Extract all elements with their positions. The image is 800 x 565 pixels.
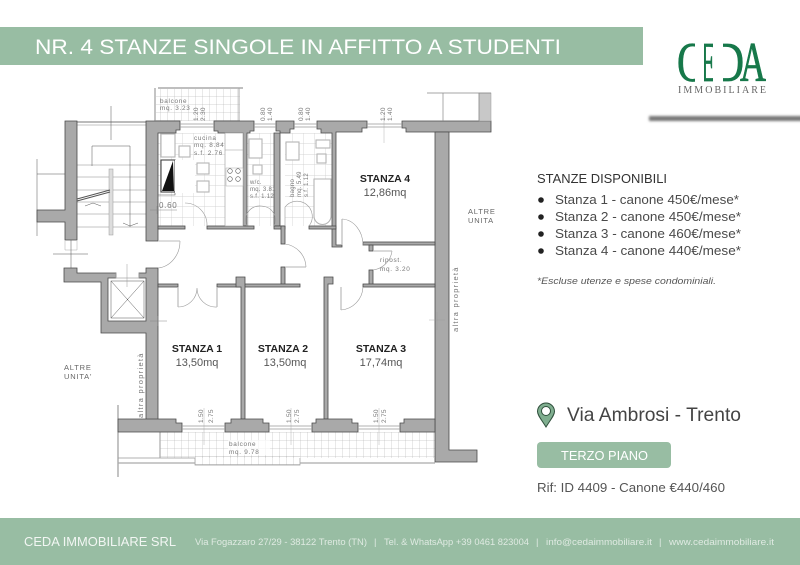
room labels xyxy=(172,173,410,369)
window dimensions: 2.30 xyxy=(200,107,207,121)
logo: CEDA Immobiliare: D xyxy=(714,32,744,94)
east wall xyxy=(435,132,477,462)
other-unit labels: mq. 9.78 xyxy=(229,449,259,456)
rooms north walls xyxy=(158,284,178,287)
footer: | xyxy=(536,537,538,548)
available rooms list xyxy=(537,171,741,287)
kitchen fixtures: cucina xyxy=(194,135,217,142)
logo: CEDA Immobiliare: IMMOBILIARE xyxy=(678,85,766,96)
other-unit labels xyxy=(64,207,496,456)
walls xyxy=(37,93,491,462)
window dimensions: 1.20 xyxy=(193,107,200,121)
upper balcony: balcone xyxy=(160,98,187,105)
other-unit labels: UNITA' xyxy=(64,372,92,381)
kitchen fixtures xyxy=(150,133,243,226)
window dimensions: 0.80 xyxy=(298,107,305,121)
other-unit labels: mq. 3.20 xyxy=(380,266,410,273)
window dimensions: 2.75 xyxy=(381,409,388,423)
other-unit labels: UNITA xyxy=(468,216,494,225)
available rooms list: *Escluse utenze e spese condominiali. xyxy=(537,276,716,287)
logo: CEDA Immobiliare: C xyxy=(677,32,704,94)
doors xyxy=(158,201,392,310)
window dimensions: 1.40 xyxy=(267,107,274,121)
main north wall pieces xyxy=(146,121,180,241)
upper balcony xyxy=(155,88,243,121)
room labels: STANZA 4 xyxy=(360,173,410,185)
other-unit labels: altra proprietà xyxy=(136,352,145,418)
logo: CEDA Immobiliare: A xyxy=(740,32,766,94)
footer: www.cedaimmobiliare.it xyxy=(668,537,774,548)
kitchen fixtures: 0.60 xyxy=(159,201,177,210)
footer: Tel. & WhatsApp +39 0461 823004 xyxy=(384,537,529,548)
reference line: Rif: ID 4409 - Canone €440/460 xyxy=(537,481,725,495)
available rooms list: STANZE DISPONIBILI xyxy=(537,171,667,186)
room labels: 13,50mq xyxy=(264,357,306,369)
room labels: 17,74mq xyxy=(360,357,402,369)
footer: CEDA IMMOBILIARE SRL xyxy=(24,535,176,549)
window dimensions: 1.40 xyxy=(387,107,394,121)
bathroom fixtures: s.f. 1.12 xyxy=(250,194,274,200)
floor badge xyxy=(537,442,671,468)
other-unit labels: ALTRE xyxy=(64,363,92,372)
available rooms list: Stanza 1 - canone 450€/mese* xyxy=(555,192,739,207)
elevator shaft xyxy=(111,264,167,326)
other-unit labels: ALTRE xyxy=(468,207,496,216)
title banner: NR. 4 STANZE SINGOLE IN AFFITTO A STUDENTI xyxy=(35,35,561,59)
floor plan xyxy=(37,88,496,477)
window dimensions: 2.75 xyxy=(208,409,215,423)
window dimensions: 1.50 xyxy=(198,409,205,423)
footer: Via Fogazzaro 27/29 - 38122 Trento (TN) xyxy=(195,537,367,548)
logo: CEDA Immobiliare xyxy=(677,32,766,96)
available rooms list: Stanza 4 - canone 440€/mese* xyxy=(555,243,741,258)
bathroom fixtures: mq. 5.49 xyxy=(297,171,303,197)
title banner xyxy=(0,27,643,65)
elevator wall xyxy=(64,268,158,420)
staircase xyxy=(37,106,146,268)
room labels: 13,50mq xyxy=(176,357,218,369)
other-unit labels: balcone xyxy=(229,441,256,448)
stanza 4 south wall, ripostiglio xyxy=(363,242,435,245)
footer: | xyxy=(659,537,661,548)
kitchen and bath south walls xyxy=(158,226,185,229)
other-unit labels: altra proprietà xyxy=(451,266,460,332)
room labels: STANZA 1 xyxy=(172,343,222,355)
south wall blocks xyxy=(118,419,182,432)
room labels: STANZA 3 xyxy=(356,343,406,355)
window dimensions: 2.75 xyxy=(294,409,301,423)
logo shadow bar xyxy=(649,116,800,121)
room labels: STANZA 2 xyxy=(258,343,308,355)
window dimensions: 1.40 xyxy=(305,107,312,121)
room labels: 12,86mq xyxy=(364,187,406,199)
bathroom fixtures: s.f. 1.12 xyxy=(304,173,310,197)
other-unit labels: ripost. xyxy=(380,257,402,264)
footer xyxy=(0,518,800,565)
tiled floors: kitchen and bathrooms xyxy=(158,133,332,226)
stair wall xyxy=(37,121,77,240)
window dimensions: 1.20 xyxy=(380,107,387,121)
window dimensions xyxy=(193,107,394,423)
footer: | xyxy=(374,537,376,548)
window dimensions: 1.50 xyxy=(373,409,380,423)
floor badge: TERZO PIANO xyxy=(561,448,648,463)
bathroom fixtures: bagno xyxy=(290,178,296,197)
bathroom fixtures xyxy=(249,139,331,224)
lower balcony xyxy=(118,405,435,477)
bathroom fixtures: mq. 3.81 xyxy=(250,187,276,193)
corridor stub xyxy=(281,267,285,285)
kitchen fixtures: s.f. 2.76 xyxy=(194,150,223,157)
windows xyxy=(116,124,402,429)
logo: CEDA Immobiliare: E xyxy=(700,32,717,94)
window dimensions: 1.50 xyxy=(286,409,293,423)
icon: location pin xyxy=(538,403,554,427)
bathroom fixtures: w/c. xyxy=(249,180,262,186)
window dimensions: 0.80 xyxy=(260,107,267,121)
partitions xyxy=(236,277,245,419)
available rooms list: Stanza 2 - canone 450€/mese* xyxy=(555,209,741,224)
upper balcony: mq. 3.23 xyxy=(160,105,190,112)
footer: info@cedaimmobiliare.it xyxy=(546,537,652,548)
kitchen fixtures: mq. 8.84 xyxy=(194,142,224,149)
address: Via Ambrosi - Trento xyxy=(567,404,741,426)
available rooms list: Stanza 3 - canone 460€/mese* xyxy=(555,226,741,241)
